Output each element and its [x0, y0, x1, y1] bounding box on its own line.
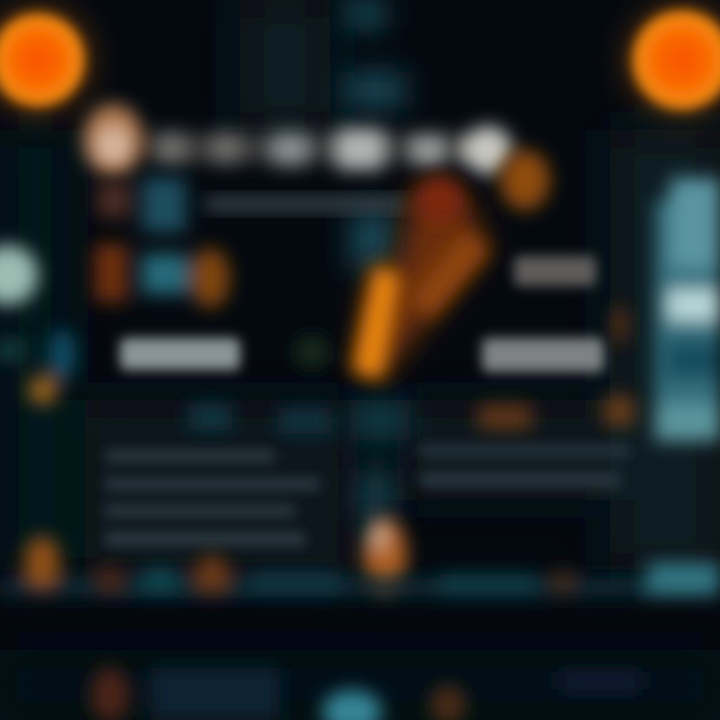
footer elements	[90, 667, 643, 720]
text block: left	[105, 450, 320, 546]
icon: central orange arrow	[352, 150, 550, 380]
icon: left orange sun	[0, 2, 96, 118]
left edge shape	[0, 245, 76, 405]
subtitle	[205, 197, 410, 211]
text block: right	[420, 445, 630, 488]
bottom strip	[0, 536, 720, 596]
icon: small green marker	[294, 336, 330, 368]
icon: right small orange marker	[610, 305, 630, 345]
title	[83, 104, 512, 176]
panel: left column top icon	[94, 178, 230, 308]
panel: right building	[655, 178, 720, 441]
heading: right panel	[482, 338, 604, 372]
heading: left panel	[120, 338, 240, 370]
icon: right orange sun	[622, 0, 720, 120]
icon: bottom flame	[363, 517, 407, 593]
row of labels: mid blobs	[188, 396, 634, 434]
central teal column	[345, 0, 410, 520]
heading: right panel top	[514, 256, 596, 286]
